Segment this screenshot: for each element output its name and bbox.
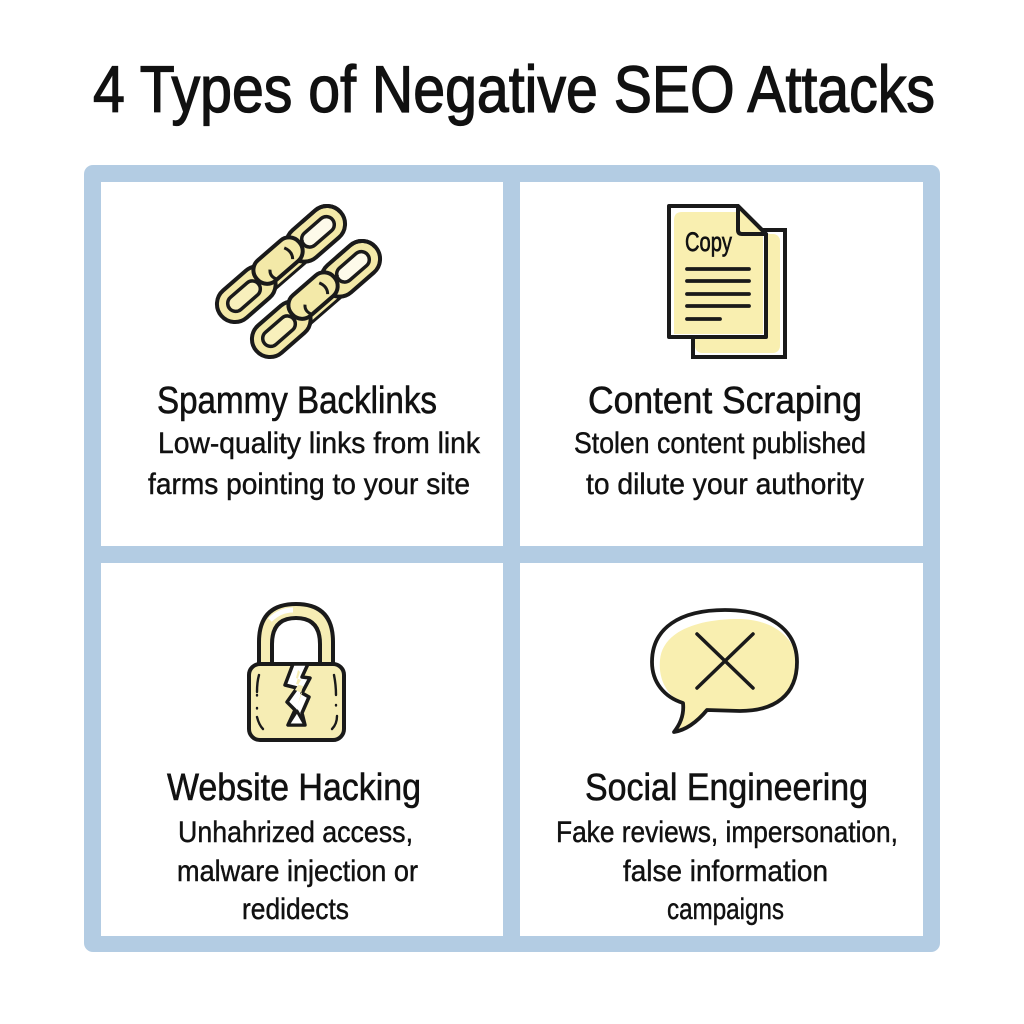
panel: website hacking — [167, 604, 421, 926]
icon: copied documents — [669, 206, 785, 357]
text: spammy backlinks description: farms pointing to your site — [148, 468, 470, 501]
text: website hacking description: redidects — [242, 893, 349, 926]
text: social engineering description: Fake reviews, impersonation, — [556, 816, 898, 849]
icon: copied documents: Copy — [685, 227, 732, 257]
text: social engineering description: false information — [623, 855, 828, 888]
icon: broken chains — [210, 199, 387, 364]
heading: content scraping: Content Scraping — [588, 380, 862, 422]
heading: spammy backlinks: Spammy Backlinks — [157, 380, 437, 422]
text: website hacking description: Unhahrized access, — [178, 816, 413, 849]
panel: social engineering — [556, 610, 898, 926]
text: social engineering description — [556, 816, 898, 926]
heading: social engineering: Social Engineering — [585, 767, 868, 809]
text: content scraping description: to dilute your authority — [586, 468, 864, 501]
icon: speech bubble with cross — [652, 610, 798, 732]
icon: cracked padlock — [249, 604, 344, 740]
panel: grid frame — [84, 165, 940, 952]
text: social engineering description: campaigns — [667, 893, 784, 926]
panel: spammy backlinks — [148, 199, 481, 501]
text: website hacking description — [177, 816, 418, 926]
text: spammy backlinks description — [148, 427, 481, 501]
text: website hacking description: malware injection or — [177, 855, 418, 888]
text: content scraping description: Stolen content published — [574, 427, 866, 460]
text: spammy backlinks description: Low-quality links from link — [158, 427, 481, 460]
text: content scraping description — [574, 427, 866, 501]
heading: website hacking: Website Hacking — [167, 767, 421, 809]
panel: content scraping — [574, 206, 866, 501]
